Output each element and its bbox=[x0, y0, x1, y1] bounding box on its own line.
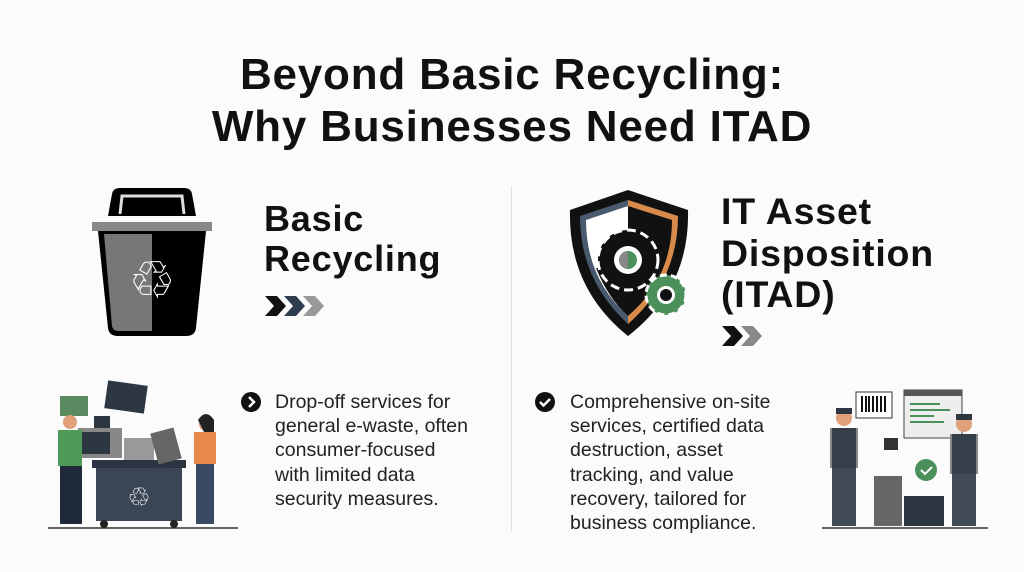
heading: basic recycling: Recycling bbox=[264, 238, 441, 279]
text: ITAD description: recovery, tailored for bbox=[570, 488, 746, 510]
chevrons left bbox=[265, 296, 324, 316]
heading: ITAD: (ITAD) bbox=[721, 273, 835, 315]
text: ITAD description: destruction, asset bbox=[570, 439, 723, 461]
text: ITAD description: tracking, and value bbox=[570, 464, 734, 486]
title bbox=[212, 50, 812, 151]
bullet: check bbox=[535, 392, 555, 412]
illustration: people recycling: ♲ bbox=[127, 483, 151, 513]
icon: recycling bin bbox=[92, 188, 212, 336]
text: ITAD description: services, certified data bbox=[570, 415, 764, 437]
heading: ITAD: Disposition bbox=[721, 232, 934, 274]
heading: basic recycling bbox=[264, 198, 441, 279]
text: ITAD description: business compliance. bbox=[570, 512, 756, 534]
text: basic recycling description: consumer-focused bbox=[275, 439, 435, 461]
title: Beyond Basic Recycling: bbox=[240, 50, 784, 99]
text: basic recycling description: Drop-off services for bbox=[275, 391, 450, 413]
chevrons right bbox=[722, 326, 762, 346]
text: basic recycling description: general e-waste, often bbox=[275, 415, 468, 437]
icon: shield with gears bbox=[570, 190, 688, 336]
heading: basic recycling: Basic bbox=[264, 198, 364, 239]
text: ITAD description: Comprehensive on-site bbox=[570, 391, 771, 413]
text: basic recycling description: with limited data bbox=[275, 464, 415, 486]
text: basic recycling description bbox=[275, 391, 468, 510]
heading: ITAD bbox=[721, 190, 934, 315]
bullet: arrow bbox=[241, 392, 261, 412]
icon: recycling bin: ♲ bbox=[129, 251, 175, 311]
illustration: technicians bbox=[822, 390, 988, 529]
title: Why Businesses Need ITAD bbox=[212, 102, 812, 151]
heading: ITAD: IT Asset bbox=[721, 190, 872, 232]
illustration: people recycling bbox=[48, 380, 238, 529]
text: basic recycling description: security measures. bbox=[275, 488, 439, 510]
text: ITAD description bbox=[570, 391, 771, 534]
